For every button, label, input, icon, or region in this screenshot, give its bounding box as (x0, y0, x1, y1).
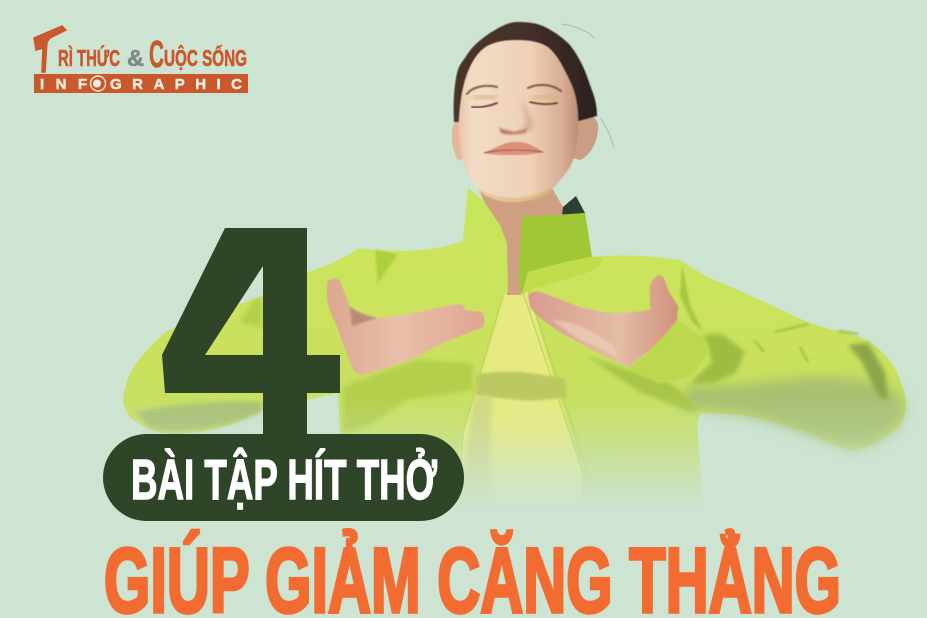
right sleeve shading (680, 377, 905, 450)
shirt shadow (476, 372, 567, 401)
right hand palm light (552, 320, 620, 358)
mouth (484, 142, 543, 155)
big number 4 (162, 228, 340, 450)
left sleeve folds (375, 250, 398, 283)
right collar (518, 213, 592, 295)
jacket and arms (123, 188, 906, 530)
pill: subtitle (103, 434, 464, 521)
logo wordmark: C (149, 34, 164, 76)
face (459, 40, 578, 202)
left collar (463, 188, 508, 296)
pill text: BÀI TẬP HÍT THỞ (131, 447, 437, 512)
logo wordmark (58, 34, 247, 76)
torso shadow left (343, 360, 473, 433)
logo mark: roof T (34, 26, 66, 72)
logo wordmark: UỘC SỐNG (164, 44, 247, 71)
logo (34, 26, 248, 93)
logo banner: INF (40, 76, 87, 93)
logo banner: GRAPHIC (110, 76, 242, 93)
back collar (562, 196, 585, 215)
right ear (572, 115, 598, 160)
shirt (458, 292, 582, 485)
logo banner (34, 74, 248, 93)
left ear (452, 122, 466, 160)
eye shadow (472, 96, 557, 99)
chin shadow (480, 186, 552, 201)
neck (478, 188, 563, 295)
nose shadow (518, 98, 533, 134)
brows (467, 85, 561, 94)
nose tip (499, 127, 528, 134)
photo: woman breathing in green jacket (123, 22, 906, 530)
logo wordmark: & (127, 45, 144, 71)
loose hair strands (562, 24, 614, 148)
zipper lines (522, 290, 588, 482)
left hand (327, 278, 484, 375)
right hand (528, 275, 678, 367)
right cuff (628, 320, 708, 384)
left hand palm shadow (350, 307, 377, 326)
logo wordmark: RÌ THỨC (58, 44, 120, 71)
closed eyes (472, 102, 557, 107)
hair (454, 22, 597, 122)
